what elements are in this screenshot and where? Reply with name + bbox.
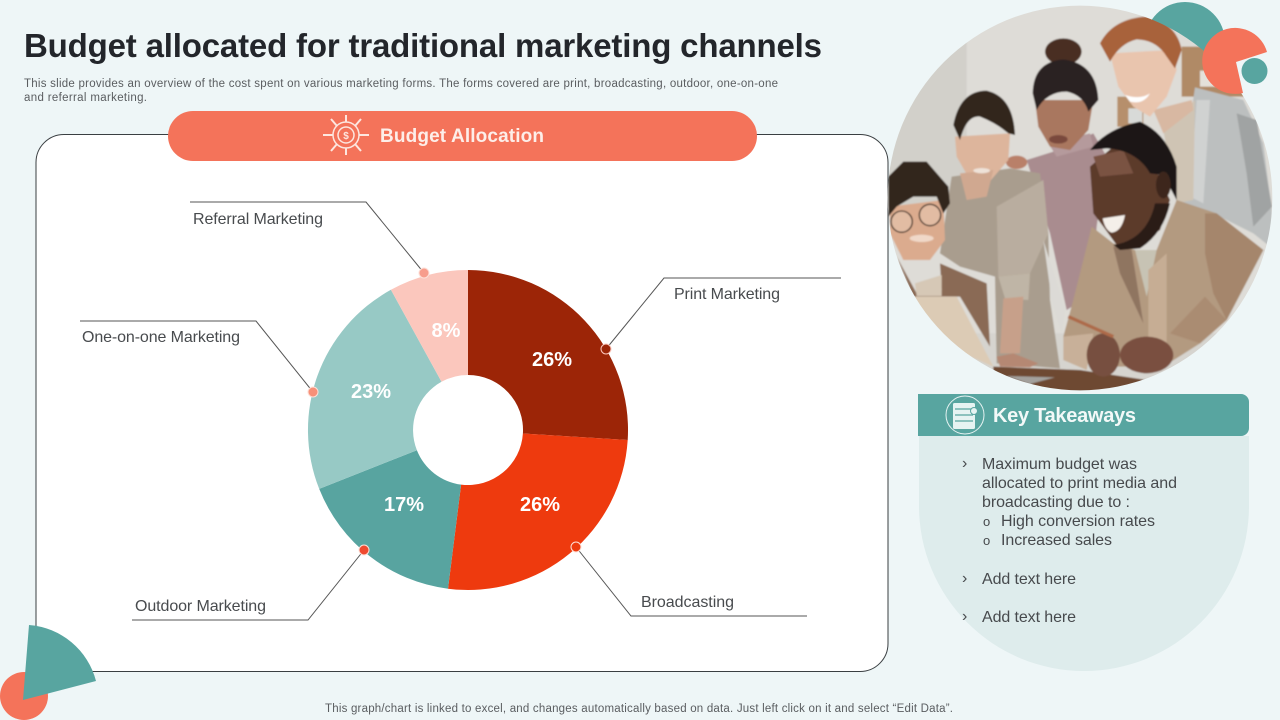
takeaway bullet list: Add text here [982,571,1076,588]
panel: key takeaways [918,394,1249,671]
callout: one-on-one marketing [80,321,318,397]
takeaway bullet list: allocated to print media and [982,475,1177,492]
header: key takeaways [918,394,1249,436]
donut chart: 17% [384,494,424,516]
callout: print marketing: Print Marketing [674,286,780,303]
photo: team around a laptop [880,0,1280,400]
subtitle text: This slide provides an overview of the cost spent on various marketing forms. The forms covered are print, broadcasting, outdoor, one-on-one [24,78,778,90]
laptop [913,297,993,367]
takeaway bullet list: o [983,533,990,548]
footer note: This graph/chart is linked to excel, and changes automatically based on data. Just left click on it and select “Edit Data”. [325,703,953,715]
donut chart: 23% [351,381,391,403]
header: key takeaways: Key Takeaways [993,405,1136,427]
takeaway bullet list: Increased sales [1001,532,1112,549]
takeaway bullet list: o [983,514,990,529]
takeaway bullet list: broadcasting due to : [982,494,1130,511]
panel: budget allocation [36,134,888,672]
subtitle text [24,78,778,104]
bun haired woman [1027,133,1107,310]
donut chart: 26% [532,349,572,371]
red haired man [1180,87,1272,247]
donut chart: 26% [520,494,560,516]
donut chart: 8% [432,320,461,342]
subtitle text: and referral marketing. [24,92,147,104]
header pill: budget allocation [168,111,757,161]
icon: checklist document [946,396,984,434]
light gap [1043,242,1050,284]
decoration: coral pie and teal dot [1202,28,1268,94]
icon: budget wheel [323,115,369,155]
wall [888,6,1272,334]
takeaway bullet list: › [962,570,967,587]
takeaway bullet list: Maximum budget was [982,456,1137,473]
takeaway bullet list: High conversion rates [1001,513,1155,530]
takeaway bullet list: › [962,608,967,625]
donut chart [308,270,628,590]
header pill: budget allocation: Budget Allocation [380,126,544,147]
callout: referral marketing: Referral Marketing [193,211,323,228]
takeaway bullet list: Add text here [982,609,1076,626]
takeaway bullet list: › [962,455,967,472]
smiling man [1063,200,1227,368]
title: Budget allocated for traditional marketing channels [24,27,822,64]
table [993,367,1147,393]
callout: outdoor marketing: Outdoor Marketing [135,598,266,615]
callout: broadcasting: Broadcasting [641,594,734,611]
callout: one-on-one marketing: One-on-one Marketing [82,329,240,346]
sweater woman [940,168,1060,368]
curly haired woman [897,257,990,347]
callout: print marketing [601,278,841,354]
decoration: bottom left coral circle and teal sector [0,625,96,720]
callout: outdoor marketing [132,545,369,620]
callout: referral marketing [190,202,429,278]
hand on shoulder [1006,156,1027,169]
takeaway bullet list [962,455,1177,626]
callout: broadcasting [571,542,807,616]
decoration: top right teal semicircle [1145,2,1225,82]
icon: budget wheel: $ [343,131,349,142]
